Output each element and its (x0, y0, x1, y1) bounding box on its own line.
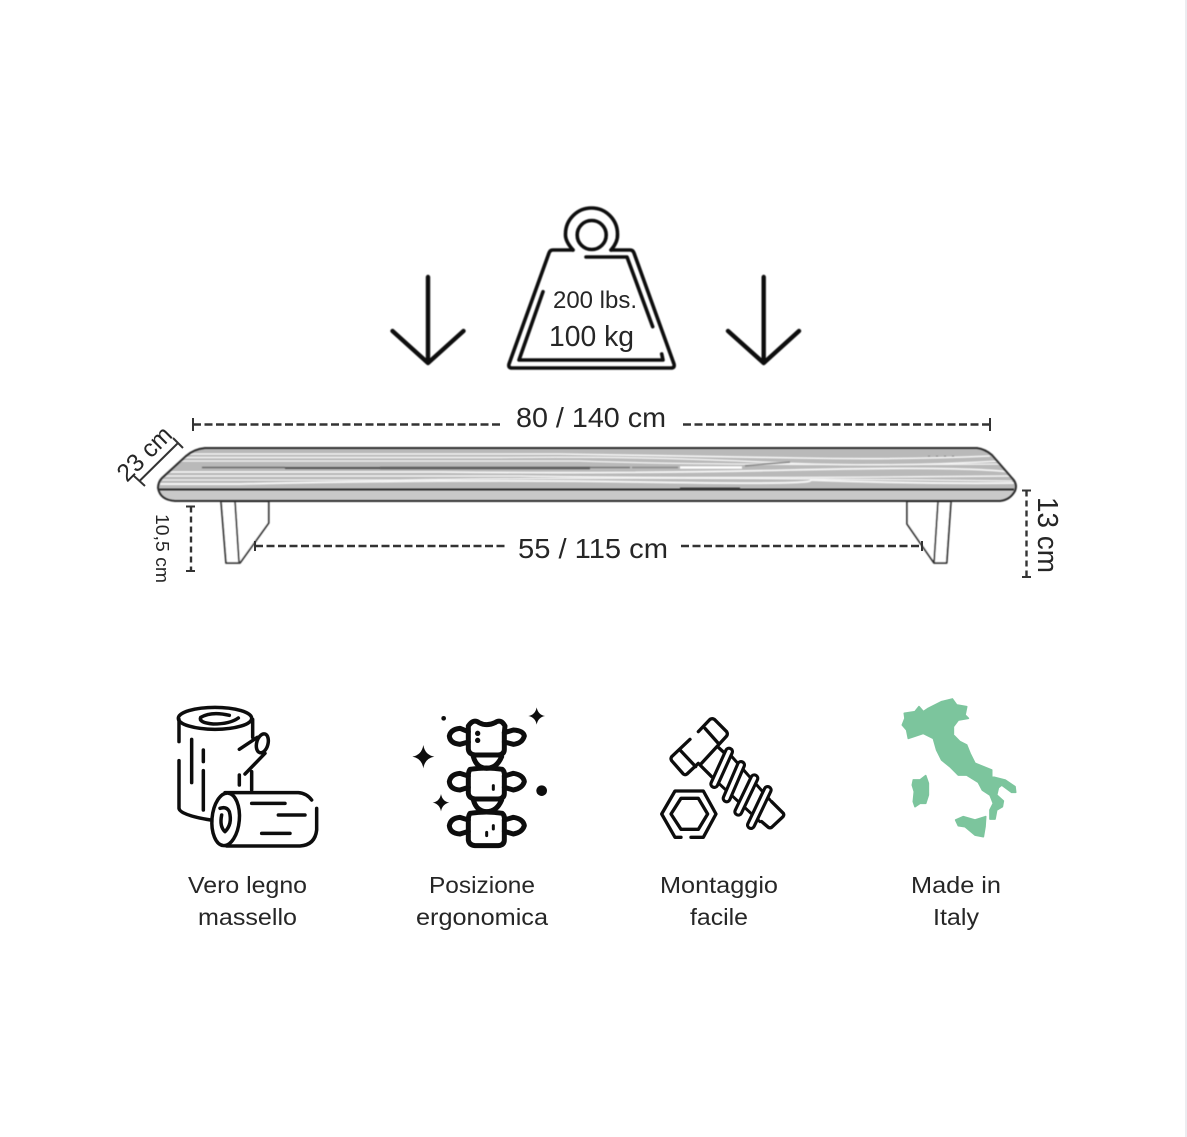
text: Posizione ergonomica: Posizione (429, 872, 535, 898)
icon: bolt and nut (662, 719, 784, 837)
arrow: right down (728, 277, 799, 363)
vertebra top (449, 721, 524, 755)
text: Montaggio facile: facile (690, 904, 748, 930)
icon: spine with sparkles (412, 707, 547, 846)
vertebra middle (449, 768, 524, 799)
text: Montaggio facile (660, 872, 778, 930)
icon: wood logs (178, 707, 317, 847)
vertebra lower (449, 812, 524, 846)
arrow: left down (392, 277, 464, 363)
shelf legs (221, 501, 951, 563)
dimension: total height 13 cm: 13 cm (1031, 497, 1063, 573)
text: Montaggio facile: Montaggio (660, 872, 778, 898)
text: Vero legno massello (188, 872, 307, 930)
dimension: length 80 / 140 cm: 80 / 140 cm (516, 402, 666, 433)
text: 100 kg: 100 kg (549, 321, 634, 353)
sparkle lower left (433, 794, 449, 811)
text: Made in Italy: Italy (933, 904, 980, 930)
text: Vero legno massello: Vero legno (188, 872, 307, 898)
shelf board illustration (150, 445, 1030, 563)
dimension: leg height 10,5 cm (152, 506, 195, 583)
dimension: leg height 10,5 cm: 10,5 cm (152, 514, 172, 583)
Sicily (956, 817, 986, 837)
shelf front edge (158, 489, 1016, 501)
icon: weight 100 kg (509, 208, 674, 368)
text: Made in Italy: Made in (911, 872, 1001, 898)
dimension: depth 23 cm: 23 cm (111, 421, 178, 487)
shelf outline (158, 448, 1016, 501)
text: Vero legno massello: massello (198, 904, 297, 930)
text: Posizione ergonomica (416, 872, 548, 930)
text: Posizione ergonomica: ergonomica (416, 904, 548, 930)
text: 200 lbs: 200 lbs. (553, 287, 637, 314)
sparkle large (412, 745, 434, 768)
dimension: leg spacing 55 / 115 cm (255, 533, 922, 564)
Sardinia (912, 776, 928, 807)
dimension: length 80 / 140 cm (193, 402, 990, 433)
sparkle top right (528, 707, 545, 725)
icon: map of Italy (902, 699, 1016, 837)
dimension: leg spacing 55 / 115 cm: 55 / 115 cm (518, 533, 668, 564)
shelf top surface with wood grain (158, 448, 1016, 489)
text: Made in Italy (911, 872, 1001, 930)
